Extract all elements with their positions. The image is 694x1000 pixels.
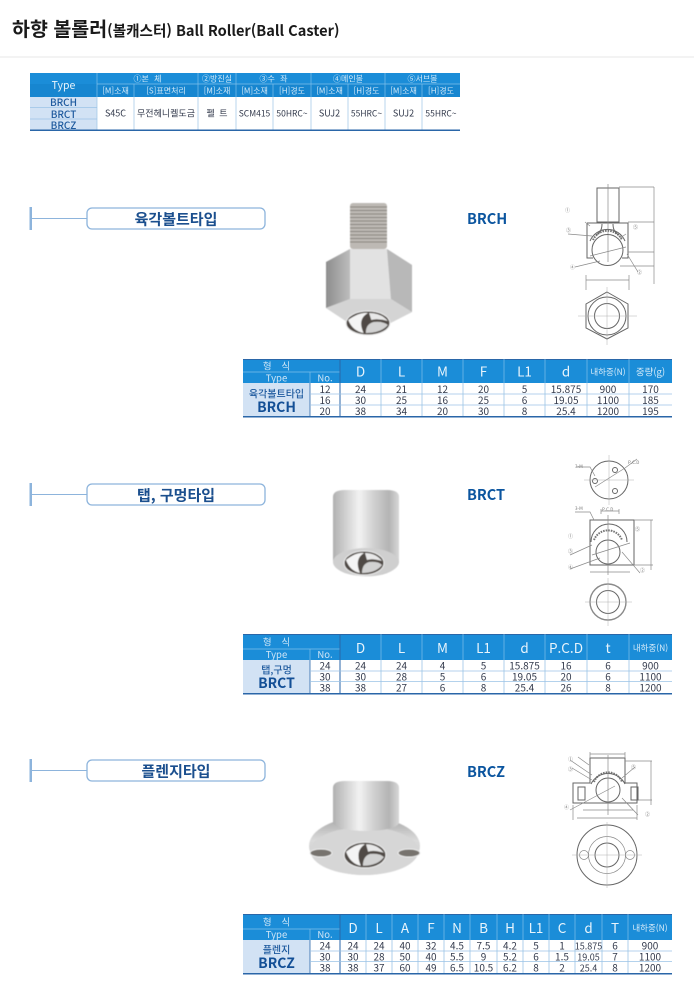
dimension table: BRCH: 25.4 bbox=[556, 403, 576, 418]
material specification table: BRCZ bbox=[51, 117, 76, 132]
dimension table: BRCH: 8 bbox=[522, 403, 528, 418]
dimension table: BRCT: 38 bbox=[355, 680, 366, 694]
dimension table: BRCZ: F bbox=[427, 917, 435, 937]
technical drawing: BRCH: ③ bbox=[566, 227, 571, 234]
material specification table: 55HRC~ bbox=[425, 108, 457, 120]
dimension table: BRCH: 15.875 bbox=[551, 381, 582, 396]
dimension table: BRCZ: 24 bbox=[347, 938, 359, 952]
dimension table: BRCZ: 38 bbox=[319, 960, 331, 974]
dimension table: BRCZ: 7.5 bbox=[477, 938, 491, 952]
dimension table: BRCT: D bbox=[356, 637, 365, 657]
material specification table: 55HRC~ bbox=[351, 108, 382, 120]
technical drawing: BRCZ: ④ bbox=[564, 804, 569, 811]
dimension table: BRCH: BRCH bbox=[257, 397, 296, 417]
dimension table: BRCT: 5 bbox=[440, 668, 446, 684]
section label: tap hole type bbox=[30, 483, 265, 506]
dimension table: BRCH: 5 bbox=[522, 381, 528, 396]
section label: flange type: 플렌지타입 bbox=[141, 760, 211, 782]
dimension table: BRCT: 1200 bbox=[639, 680, 662, 694]
dimension table: BRCZ: 19.05 bbox=[577, 950, 600, 964]
material specification table: BRCT bbox=[51, 106, 76, 121]
dimension table: BRCH: 12 bbox=[437, 381, 448, 396]
dimension table: BRCH: 30 bbox=[355, 392, 366, 407]
material specification table: ②방진실 bbox=[202, 74, 232, 84]
dimension table: BRCT: 5 bbox=[481, 658, 487, 672]
dimension table: BRCZ: 2 bbox=[559, 960, 565, 974]
dimension table: BRCH: d bbox=[562, 360, 570, 380]
material specification table: ①본 체 bbox=[134, 74, 161, 84]
dimension table: BRCZ: 플렌지 bbox=[263, 942, 290, 956]
material specification table: [S]표면처리 bbox=[146, 86, 186, 96]
title: 하향 볼롤러(볼캐스터) Ball Roller(Ball Caster) bbox=[12, 13, 339, 42]
dimension table: BRCZ: 900 bbox=[642, 938, 659, 952]
material specification table: S45C bbox=[105, 106, 126, 120]
product name: BRCZ: BRCZ bbox=[467, 761, 505, 782]
dimension table: BRCH: 12 bbox=[319, 381, 331, 396]
material specification table: [M]소재 bbox=[316, 86, 343, 96]
dimension table: BRCT: 6 bbox=[605, 658, 611, 672]
dimension table: BRCH: 19.05 bbox=[554, 392, 579, 407]
dimension table: BRCT: 19.05 bbox=[512, 668, 537, 684]
dimension table: BRCT: No. bbox=[317, 647, 333, 661]
dimension table: BRCZ: 1100 bbox=[639, 948, 662, 964]
dimension table: BRCZ: L bbox=[375, 917, 383, 937]
dimension table: BRCT: t bbox=[605, 637, 611, 657]
dimension table: BRCZ: 6 bbox=[533, 948, 539, 964]
dimension table: BRCZ: 5 bbox=[533, 938, 539, 952]
dimension table: BRCT: 26 bbox=[560, 680, 572, 694]
steel ball bbox=[344, 842, 386, 868]
steel ball bbox=[344, 551, 384, 575]
material specification table: [M]소재 bbox=[204, 86, 230, 96]
dimension table: BRCT: 38 bbox=[319, 680, 331, 694]
dimension table: BRCT: 28 bbox=[396, 668, 407, 684]
dimension table: BRCT: P.C.D bbox=[549, 637, 583, 657]
material specification table: [M]소재 bbox=[241, 86, 268, 96]
dimension table: BRCZ: 7 bbox=[612, 948, 618, 964]
dimension table: BRCZ: 30 bbox=[347, 948, 359, 964]
product name: BRCT: BRCT bbox=[467, 484, 505, 505]
dimension table: BRCH: 21 bbox=[396, 381, 407, 396]
dimension table: BRCH: L bbox=[398, 360, 405, 380]
technical drawing: BRCH: ⑤ bbox=[633, 224, 638, 231]
dimension table: BRCT: M bbox=[437, 637, 448, 657]
dimension table: BRCT: 탭,구멍 bbox=[261, 662, 292, 676]
dimension table: BRCH: Type bbox=[266, 370, 287, 384]
technical drawing: BRCT: 3-M bbox=[575, 464, 583, 470]
material specification table: [M]소재 bbox=[390, 86, 417, 96]
dimension table: BRCT: 6 bbox=[605, 668, 611, 684]
dimension table: BRCZ: 40 bbox=[425, 948, 437, 964]
dimension table: BRCZ: 38 bbox=[347, 960, 359, 974]
material specification table: [M]소재 bbox=[102, 86, 129, 96]
technical drawing: BRCT: 3-M bbox=[575, 506, 583, 512]
technical drawing: BRCZ bbox=[564, 752, 652, 888]
dimension table: BRCZ: 4.5 bbox=[450, 938, 464, 952]
technical drawing: BRCT: ② bbox=[640, 567, 645, 574]
dimension table: BRCZ: 50 bbox=[399, 948, 411, 964]
material specification table: [H]경도 bbox=[428, 86, 454, 96]
technical drawing: BRCT: ③ bbox=[568, 548, 573, 555]
dimension table: BRCH: 900 bbox=[600, 381, 617, 396]
dimension table: BRCZ: 32 bbox=[425, 938, 437, 952]
dimension table: BRCT: 내하중(N) bbox=[633, 642, 668, 654]
dimension table: BRCT: 1100 bbox=[639, 668, 662, 684]
product photo: BRCT bbox=[333, 490, 399, 576]
dimension table: BRCZ: BRCZ bbox=[258, 953, 295, 973]
dimension table: BRCH bbox=[243, 358, 672, 418]
material specification table: ④메인볼 bbox=[333, 74, 363, 84]
dimension table: BRCZ: 10.5 bbox=[474, 960, 494, 974]
dimension table: BRCH: 20 bbox=[319, 403, 331, 418]
material specification table: SUJ2 bbox=[393, 106, 414, 120]
dimension table: BRCT: L bbox=[398, 637, 405, 657]
dimension table: BRCH: 38 bbox=[355, 403, 366, 418]
dimension table: BRCZ: No. bbox=[317, 927, 333, 941]
dimension table: BRCT: 20 bbox=[560, 668, 572, 684]
dimension table: BRCH: 6 bbox=[522, 392, 528, 407]
product photo: BRCH bbox=[326, 203, 412, 335]
dimension table: BRCH: 20 bbox=[437, 403, 448, 418]
technical drawing: BRCH: ② bbox=[637, 269, 642, 276]
material specification table: 무전헤니켈도금 bbox=[137, 106, 195, 120]
dimension table: BRCZ: 8 bbox=[533, 960, 539, 974]
dimension table: BRCZ: 1.5 bbox=[555, 948, 569, 964]
dimension table: BRCT bbox=[243, 634, 672, 694]
dimension table: BRCH: 30 bbox=[478, 403, 489, 418]
technical drawing: BRCH: ① bbox=[565, 207, 570, 214]
dimension table: BRCZ: 37 bbox=[373, 960, 385, 974]
dimension table: BRCZ: 9 bbox=[481, 948, 486, 964]
steel ball bbox=[346, 311, 390, 335]
dimension table: BRCT: 형 식 bbox=[263, 634, 290, 648]
dimension table: BRCT: 30 bbox=[319, 668, 331, 684]
dimension table: BRCZ: 4.2 bbox=[503, 938, 517, 952]
dimension table: BRCZ: 6.2 bbox=[503, 960, 517, 974]
dimension table: BRCZ: D bbox=[348, 917, 358, 937]
technical drawing: BRCH: ④ bbox=[570, 264, 575, 271]
technical drawing: BRCZ: ② bbox=[645, 811, 650, 818]
dimension table: BRCH: 내하중(N) bbox=[590, 366, 626, 378]
technical drawing: BRCZ: ① bbox=[568, 756, 573, 763]
technical drawing: BRCT: P.C.D bbox=[602, 507, 613, 513]
dimension table: BRCH: 중량(g) bbox=[636, 364, 665, 378]
dimension table: BRCH: 16 bbox=[437, 392, 448, 407]
dimension table: BRCH: 1200 bbox=[597, 403, 620, 418]
dimension table: BRCZ: 1 bbox=[559, 938, 565, 952]
material specification table: SCM415 bbox=[239, 108, 271, 120]
material specification table: [H]경도 bbox=[354, 86, 379, 96]
dimension table: BRCZ: H bbox=[505, 917, 515, 937]
material specification table: SUJ2 bbox=[319, 106, 340, 120]
dimension table: BRCT: d bbox=[520, 637, 529, 657]
dimension table: BRCH: L1 bbox=[517, 360, 532, 380]
dimension table: BRCH: No. bbox=[317, 370, 333, 384]
dimension table: BRCZ: 60 bbox=[399, 960, 411, 974]
dimension table: BRCZ: 5.5 bbox=[450, 948, 464, 964]
dimension table: BRCT: 6 bbox=[440, 680, 446, 694]
material specification table: ③수 좌 bbox=[260, 74, 288, 84]
dimension table: BRCT: 6 bbox=[481, 668, 487, 684]
dimension table: BRCH: M bbox=[437, 360, 448, 380]
dimension table: BRCH: 185 bbox=[642, 392, 659, 407]
dimension table: BRCT: 30 bbox=[355, 668, 366, 684]
technical drawing: BRCT: P.C.D bbox=[628, 460, 639, 466]
dimension table: BRCZ bbox=[243, 914, 672, 974]
dimension table: BRCT: BRCT bbox=[258, 673, 295, 693]
material specification table: [H]경도 bbox=[279, 86, 305, 96]
dimension table: BRCT: 900 bbox=[642, 658, 659, 672]
dimension table: BRCT: 16 bbox=[560, 658, 572, 672]
dimension table: BRCZ: 24 bbox=[373, 938, 385, 952]
dimension table: BRCT: 8 bbox=[481, 680, 487, 694]
dimension table: BRCH: 1100 bbox=[597, 392, 620, 407]
technical drawing: BRCZ: ⑤ bbox=[631, 764, 636, 771]
dimension table: BRCT: Type bbox=[266, 647, 287, 661]
technical drawing: BRCT: ④ bbox=[568, 564, 573, 571]
dimension table: BRCZ: d bbox=[584, 917, 593, 937]
section label: hex bolt type: 육각볼트타입 bbox=[135, 208, 217, 230]
section label: tap hole type: 탭, 구멍타입 bbox=[137, 484, 215, 506]
dimension table: BRCH: 24 bbox=[355, 381, 366, 396]
section label: hex bolt type bbox=[30, 207, 265, 230]
technical drawing: BRCT bbox=[568, 455, 653, 626]
dimension table: BRCZ: A bbox=[401, 917, 410, 937]
dimension table: BRCZ: 1200 bbox=[639, 960, 662, 974]
dimension table: BRCH: 형 식 bbox=[263, 358, 290, 372]
dimension table: BRCT: 8 bbox=[605, 680, 611, 694]
section label: flange type bbox=[30, 759, 265, 782]
dimension table: BRCZ: 6.5 bbox=[450, 960, 464, 974]
dimension table: BRCZ: Type bbox=[266, 927, 287, 941]
technical drawing: BRCH bbox=[565, 184, 654, 345]
dimension table: BRCH: 170 bbox=[642, 381, 659, 396]
dimension table: BRCZ: B bbox=[479, 917, 488, 937]
technical drawing: BRCT: ⑤ bbox=[635, 526, 640, 533]
dimension table: BRCH: 육각볼트타입 bbox=[249, 386, 304, 400]
dimension table: BRCH: 195 bbox=[642, 403, 659, 418]
material specification table: BRCH bbox=[50, 94, 77, 109]
dimension table: BRCZ: 6 bbox=[612, 938, 618, 952]
dimension table: BRCZ: 형 식 bbox=[263, 914, 290, 928]
dimension table: BRCZ: C bbox=[558, 917, 567, 937]
dimension table: BRCT: 24 bbox=[319, 658, 331, 672]
dimension table: BRCZ: 5.2 bbox=[503, 948, 517, 964]
technical drawing: BRCZ: ③ bbox=[568, 766, 573, 773]
dimension table: BRCZ: 15.875 bbox=[575, 940, 602, 952]
dimension table: BRCT: 4 bbox=[440, 658, 446, 672]
dimension table: BRCH: F bbox=[480, 360, 488, 380]
dimension table: BRCT: 24 bbox=[396, 658, 407, 672]
dimension table: BRCZ: 25.4 bbox=[580, 962, 597, 974]
dimension table: BRCH: 20 bbox=[478, 381, 489, 396]
dimension table: BRCZ: N bbox=[452, 917, 462, 937]
dimension table: BRCZ: 40 bbox=[399, 938, 411, 952]
dimension table: BRCZ: 8 bbox=[612, 960, 618, 974]
dimension table: BRCH: 16 bbox=[319, 392, 331, 407]
product name: BRCH: BRCH bbox=[467, 208, 507, 229]
dimension table: BRCZ: 28 bbox=[373, 948, 385, 964]
material specification table bbox=[30, 73, 460, 132]
dimension table: BRCZ: 30 bbox=[319, 948, 331, 964]
dimension table: BRCZ: 24 bbox=[319, 938, 331, 952]
dimension table: BRCH: 25 bbox=[396, 392, 407, 407]
dimension table: BRCT: 27 bbox=[396, 680, 407, 694]
material specification table: 50HRC~ bbox=[276, 108, 308, 120]
dimension table: BRCZ: T bbox=[611, 917, 619, 937]
material specification table: ⑤서브볼 bbox=[407, 74, 438, 84]
dimension table: BRCH: D bbox=[356, 360, 365, 380]
technical drawing: BRCT: ① bbox=[568, 533, 573, 540]
dimension table: BRCH: 34 bbox=[396, 403, 407, 418]
dimension table: BRCT: 15.875 bbox=[509, 658, 540, 672]
dimension table: BRCT: 25.4 bbox=[515, 680, 535, 694]
dimension table: BRCH: 25 bbox=[478, 392, 489, 407]
material specification table: 펠 트 bbox=[206, 106, 228, 120]
dimension table: BRCT: 24 bbox=[355, 658, 366, 672]
dimension table: BRCZ: L1 bbox=[529, 917, 543, 937]
dimension table: BRCZ: 49 bbox=[425, 960, 437, 974]
dimension table: BRCZ: 내하중(N) bbox=[632, 922, 668, 934]
material specification table: Type bbox=[52, 78, 76, 93]
product photo: BRCZ bbox=[309, 781, 420, 875]
dimension table: BRCT: L1 bbox=[476, 637, 491, 657]
